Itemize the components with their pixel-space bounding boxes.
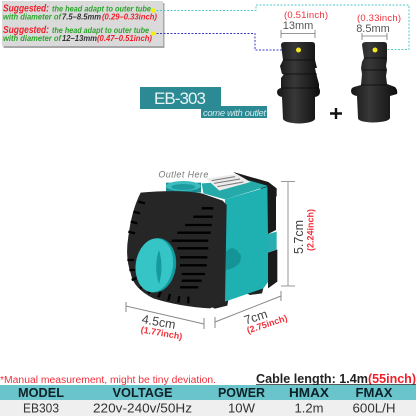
dimension: width 4.5cm: (1.77inch) bbox=[140, 324, 183, 342]
table header row: FMAX bbox=[356, 385, 393, 400]
note: 12-13mm adapter: 12–13mm bbox=[62, 34, 97, 43]
dimension: height 5.7cm bbox=[281, 182, 316, 286]
table data row bbox=[0, 400, 416, 416]
dimension: 8.5mm connector bbox=[356, 13, 401, 40]
table data row: EB303 bbox=[23, 402, 59, 416]
note: 7.5-8.5mm adapter: Suggested: bbox=[3, 4, 49, 14]
table data row: 1.2m bbox=[294, 402, 324, 416]
note: 7.5-8.5mm adapter: with diameter of bbox=[3, 12, 62, 22]
dimension: depth 7cm bbox=[215, 291, 289, 335]
pump teal knob bbox=[132, 235, 180, 295]
dimension: 8.5mm connector: (0.33inch) bbox=[357, 13, 401, 24]
note: 7.5-8.5mm adapter: (0.29–0.33inch) bbox=[102, 12, 157, 22]
label: model badge EB-303: EB-303 bbox=[154, 89, 206, 108]
note: 7.5-8.5mm adapter bbox=[3, 4, 157, 22]
table header row: MODEL bbox=[18, 385, 64, 400]
note: cable length: (55inch) bbox=[368, 372, 416, 386]
pump grille slots bbox=[127, 202, 213, 303]
dimension: depth 7cm: (2.75inch) bbox=[246, 313, 289, 335]
icon: yellow marker dots bbox=[151, 8, 155, 36]
note: 7.5-8.5mm adapter: the head adapt to outer tube bbox=[52, 4, 152, 14]
dimension: width 4.5cm: 4.5cm bbox=[141, 312, 177, 332]
label: outlet here: Outlet Here bbox=[158, 170, 208, 180]
note: 12-13mm adapter: with diameter of bbox=[3, 34, 62, 43]
label: model badge EB-303 bbox=[140, 87, 267, 119]
dimension: height 5.7cm: (2.24inch) bbox=[306, 209, 316, 251]
dimension: height 5.7cm: 5.7cm bbox=[292, 220, 306, 254]
pump teal side bbox=[225, 187, 268, 302]
pump black housing bbox=[127, 191, 227, 308]
note: cable length bbox=[256, 372, 416, 386]
table data row: 600L/H bbox=[352, 402, 396, 416]
dimension: depth 7cm: 7cm bbox=[242, 307, 269, 328]
icon: small 8.5mm connector bbox=[351, 42, 397, 122]
note: 7.5-8.5mm adapter: 7.5–8.5mm bbox=[62, 12, 101, 22]
table data row: 10W bbox=[228, 402, 255, 416]
icon: plus sign bbox=[330, 108, 342, 119]
pump spec sticker bbox=[206, 174, 251, 191]
label: model badge EB-303: come with outlet bbox=[203, 108, 266, 119]
dimension: width 4.5cm bbox=[126, 302, 204, 342]
table data row: 220v-240v/50Hz bbox=[93, 402, 192, 416]
table header row: HMAX bbox=[289, 385, 329, 400]
dimension: 13mm connector: 13mm bbox=[283, 20, 313, 32]
dimension: 13mm connector bbox=[281, 10, 328, 38]
pump illustration bbox=[127, 170, 277, 309]
pump feet bbox=[207, 288, 263, 309]
table header row bbox=[0, 385, 416, 400]
icon: large 13mm connector bbox=[277, 42, 320, 124]
arrow: blue dotted leader to large connector bbox=[153, 34, 298, 50]
arrow: teal dotted leader to small connector bbox=[153, 5, 409, 50]
table header row: VOLTAGE bbox=[112, 385, 173, 400]
table header row: POWER bbox=[218, 385, 266, 400]
note: cable length: Cable length: 1.4m bbox=[256, 372, 368, 386]
pump outlet tube bbox=[166, 181, 201, 193]
dimension: 8.5mm connector: 8.5mm bbox=[356, 23, 390, 35]
pump side clip bbox=[267, 183, 277, 288]
dimension: 13mm connector: (0.51inch) bbox=[284, 10, 328, 21]
panel: suggested adapter notes bbox=[2, 1, 164, 48]
note: 12-13mm adapter bbox=[3, 25, 152, 43]
note: 12-13mm adapter: the head adapt to outer tube bbox=[52, 26, 149, 35]
table: specifications bbox=[0, 385, 416, 416]
pump black rear cap bbox=[233, 172, 277, 197]
pump side logo bbox=[226, 248, 241, 270]
note: 12-13mm adapter: (0.47–0.51inch) bbox=[97, 34, 152, 43]
note: 12-13mm adapter: Suggested: bbox=[3, 25, 49, 36]
pump top plate bbox=[202, 181, 268, 199]
note: manual measurement disclaimer: *Manual measurement, might be tiny deviation. bbox=[0, 375, 216, 386]
